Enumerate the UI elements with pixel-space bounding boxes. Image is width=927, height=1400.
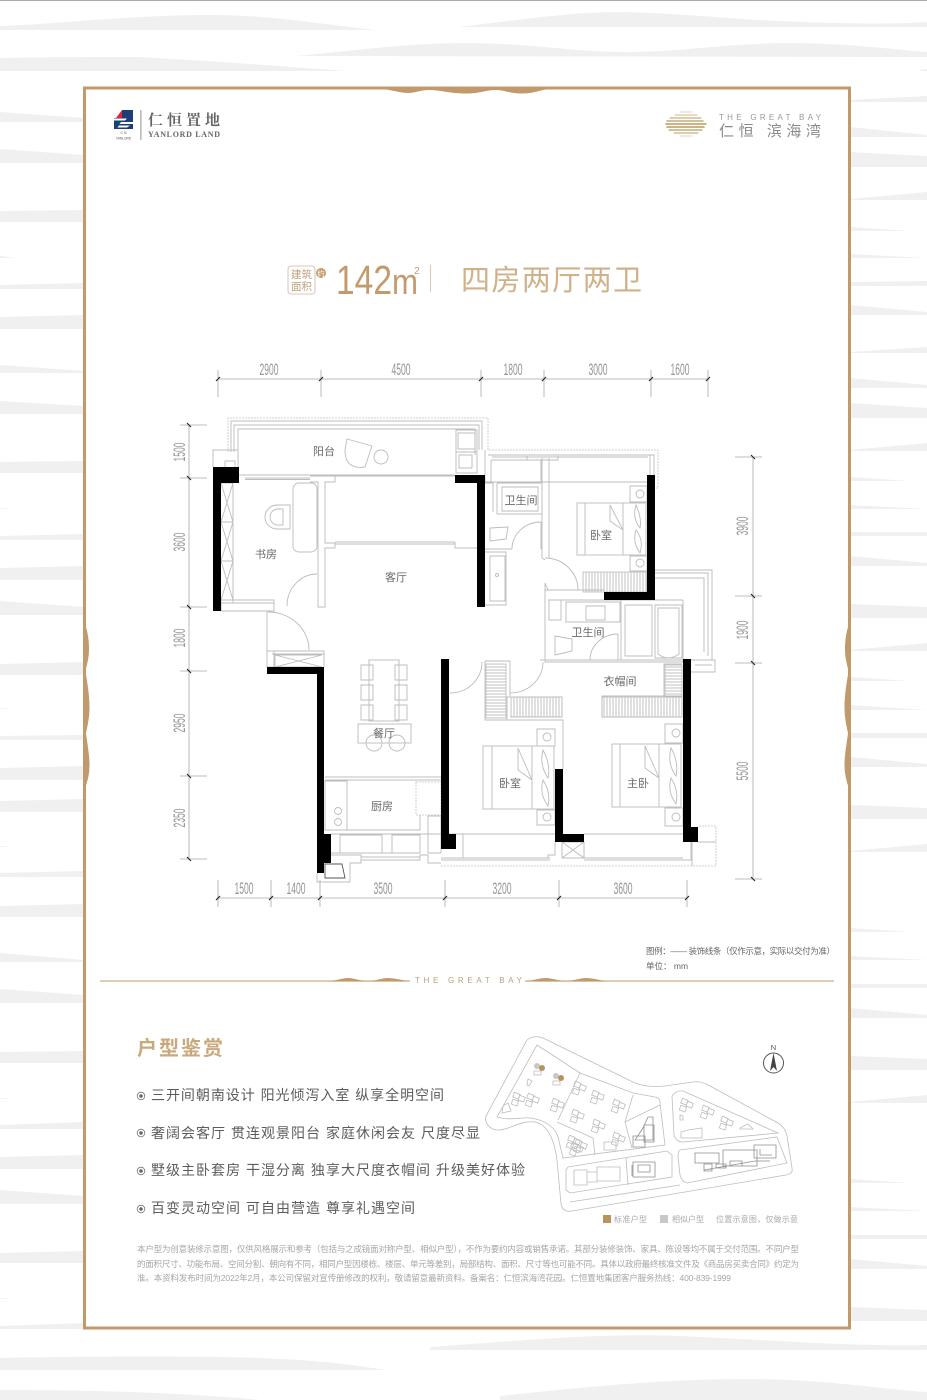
room labels: 卫生间 [572,625,604,639]
plan legend: 单位： mm [646,961,688,971]
furniture: bathroom fixtures [490,527,572,655]
title: area and layout [288,257,642,303]
dimensions: left: 1500 [170,442,189,462]
dimensions: bottom: 3200 [492,879,512,898]
logo: The Great Bay: 仁恒 滨海湾 [719,123,821,140]
disclaimer [137,1244,799,1283]
dimensions: top: 1600 [670,360,690,379]
room labels: 厨房 [371,800,393,813]
load-bearing walls [213,467,698,873]
floor plan [170,360,762,907]
dimensions: bottom: 3600 [614,879,632,898]
hatched wardrobes [486,572,682,718]
area badge [288,266,326,294]
logo: The Great Bay [666,112,822,140]
dimensions: bottom [216,879,689,907]
area value: 142 [336,257,392,303]
dimensions: bottom: 1500 [234,879,254,898]
room labels: 主卧 [627,777,649,790]
dimensions: left: 2350 [170,808,189,828]
logo: The Great Bay: THE GREAT BAY [719,113,822,122]
room labels: 客厅 [385,570,407,584]
dimensions: bottom: 1400 [286,879,306,898]
dimensions: left [170,423,207,861]
site plan legend: 相似户型 [672,1214,704,1224]
logo: Yanlord Land: C N [120,131,127,135]
shared bath [545,590,683,662]
title: area and layout: m [392,261,418,302]
site plan legend: 位置示意图，仅做示意 [716,1214,798,1224]
room labels: 衣帽间 [604,674,636,688]
dimensions: top: 2900 [260,360,278,379]
disclaimer: 的面积尺寸、功能布局、空间分割、朝向有不同，相同户型因楼栋、楼层、单元等差别，局部结构、面积、尺寸等也可能不同。具体以政府最终核准文件及《商品房买卖合同》约定为 [137,1259,799,1269]
dimensions: right: 5500 [733,762,752,780]
logo: Yanlord Land: 仁恒置地 [148,111,220,129]
dimensions: top: 3000 [588,360,608,379]
logo: Yanlord Land: YANLORD LAND [148,130,220,139]
furniture: kitchen [317,777,441,882]
layout name: 四房两厅两卫 [461,264,642,297]
area badge: 约 [317,268,325,278]
furniture: balcony chair and cabinet [345,430,477,473]
room labels: 卧室 [499,776,521,790]
dimensions: top: 1800 [504,360,522,379]
room labels: 阳台 [313,444,335,458]
furniture: dining table [358,660,411,751]
plan legend [646,946,835,971]
upper right [485,450,647,482]
furniture: study desk and chair [265,483,317,552]
room labels: 卫生间 [504,493,538,507]
highlights list [137,1087,525,1216]
site plan legend [603,1214,798,1224]
door swings [268,522,618,693]
site plan legend: 标准户型 [614,1214,647,1224]
dimensions: left: 1800 [170,628,189,648]
plan legend: 图例：—— 装饰线条（仅作示意，实际以交付为准） [646,946,835,956]
site plan [486,1037,792,1211]
highlight 3: 墅级主卧套房 干湿分离 独享大尺度衣帽间 升级美好体验 [151,1162,525,1178]
logo: Yanlord Land [114,110,220,140]
heading: unit highlights: 户型鉴赏 [137,1036,223,1060]
highlight 1: 三开间朝南设计 阳光倾泻入室 纵享全明空间 [151,1087,444,1103]
room labels: 书房 [255,548,277,561]
frame [84,88,850,1328]
area badge: 面积 [291,281,312,293]
dimensions: right: 1900 [733,620,752,640]
room labels: 卧室 [590,528,612,542]
dimensions: right: 3900 [733,516,752,536]
furniture: lower bedroom bed [483,729,555,825]
disclaimer: 准。本资料发布时间为2022年2月，本公司保留对宣传册修改的权利，敬请留意最新资料。备案名：仁恒滨海湾花园。仁恒置地集团客户服务热线：400-839-1999 [137,1273,731,1283]
lower right [485,661,562,720]
room labels [255,444,649,813]
title: area and layout: 2 [414,266,420,277]
dimensions: top: 4500 [392,360,410,379]
dimensions: left: 3600 [170,532,189,552]
disclaimer: 本户型为创意装修示意图，仅供风格展示和参考（包括与之成镜面对称户型、相似户型），不作为要约内容或销售承诺。其部分装修装饰、家具、陈设等均不属于交付范围。不同户型 [137,1244,799,1254]
north arrow: N [771,1043,776,1052]
dimensions: left: 2950 [170,714,189,732]
room labels: 餐厅 [373,726,395,740]
dimensions: bottom: 3500 [374,879,392,898]
logo: Yanlord Land: YANLORD [116,136,132,140]
furniture: upper bedroom bed [577,486,647,571]
furniture: master bed [612,724,683,826]
area badge: 建筑 [291,268,312,281]
divider [100,976,834,985]
thin walls and balcony outlines [213,418,716,866]
dimensions: top [216,360,710,397]
dimensions: right [733,455,762,881]
north arrow [764,1043,784,1073]
divider: THE GREAT BAY [415,976,523,985]
highlight 2: 奢阔会客厅 贯连观景阳台 家庭休闲会友 尺度尽显 [151,1125,480,1141]
highlight 4: 百变灵动空间 可自由营造 尊享礼遇空间 [151,1200,415,1216]
